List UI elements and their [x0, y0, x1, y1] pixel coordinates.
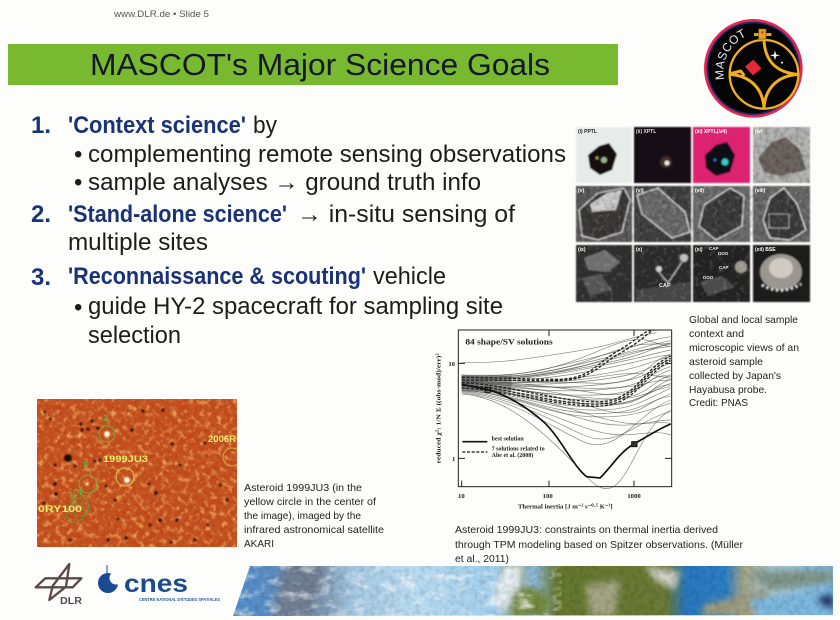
caption: sample views: Global and local sample — [689, 314, 798, 326]
chart: thermal inertia solutions — [436, 330, 672, 511]
caption: sample views: Credit: PNAS — [689, 397, 748, 409]
goal 1: • — [74, 141, 82, 168]
caption: thermal inertia chart: et al., 2011) — [455, 553, 509, 565]
panel index labels: (vii) — [695, 188, 704, 194]
caption: AKARI image: Asteroid 1999JU3 (in the — [244, 482, 362, 494]
chart axis labels: reduced χ²: 1/N Σ ((obs-mod)/err)² — [436, 353, 443, 463]
goal 3: • — [74, 294, 82, 321]
panel index labels: DOO — [718, 251, 729, 256]
goal 2: 2. — [31, 201, 51, 228]
target labels: 2 — [103, 413, 108, 423]
panel index labels: (xi) — [695, 247, 703, 253]
text block: science goals list — [31, 112, 566, 349]
caption: thermal inertia chart: Asteroid 1999JU3: constraints on thermal inertia derived — [455, 524, 718, 536]
goal 1: by — [253, 112, 277, 139]
icon: CNES logo — [98, 565, 220, 602]
target labels: 2006R — [208, 434, 236, 445]
panel index labels: (iii) XPTL(λ/4) — [695, 129, 727, 135]
chart legend: best solution — [492, 437, 524, 443]
caption: AKARI image: infrared astronomical satellite — [244, 524, 384, 536]
goal 1: complementing remote sensing observations — [88, 141, 566, 168]
heading: MASCOT's Major Science Goals — [90, 47, 550, 82]
target labels — [38, 413, 236, 515]
best solution curve — [462, 384, 671, 478]
chart legend — [462, 437, 545, 459]
goal 3: vehicle — [373, 263, 446, 290]
goal 3 — [31, 263, 503, 349]
panel index labels: (ii) XPTL — [636, 129, 656, 135]
chart legend: 7 solutions related to — [492, 446, 545, 452]
header: slide reference: www.DLR.de • Slide 5 — [113, 9, 209, 19]
caption: sample views — [689, 314, 799, 409]
goal 1: 'Context science' — [68, 112, 246, 139]
panel index labels: (v) — [578, 188, 584, 194]
chart axis labels: 1000 — [627, 493, 641, 500]
icon: DLR logo: DLR — [60, 595, 82, 607]
caption: thermal inertia chart — [455, 524, 743, 565]
target circles — [66, 426, 241, 522]
panel index labels: CAP — [659, 283, 671, 289]
target labels: 0RY100 — [38, 504, 82, 515]
goal 2: → in-situ sensing of — [297, 201, 515, 228]
caption: AKARI image — [244, 482, 384, 550]
chart legend: Abe et al. (2008) — [492, 452, 533, 459]
chart axis labels — [436, 353, 641, 511]
chart axis labels: 10 — [448, 361, 456, 368]
panel index labels: DOO — [703, 275, 714, 280]
chart axis labels: 100 — [543, 493, 553, 500]
chart axis labels: Thermal inertia [J m⁻² s⁻⁰·⁵ K⁻¹] — [518, 503, 613, 511]
panel index labels: (xii) BSE — [755, 247, 776, 253]
goal 1 — [31, 112, 566, 196]
clouds — [232, 566, 562, 616]
caption: sample views: Hayabusa probe. — [689, 384, 767, 396]
panel: Hayabusa sample micrographs — [576, 127, 810, 302]
caption: thermal inertia chart: through TPM modeling based on Spitzer observations. (Müller — [455, 539, 743, 551]
target labels: 1999JU3 — [103, 454, 148, 465]
caption: sample views: collected by Japan's — [689, 370, 781, 382]
caption: sample views: microscopic views of an — [689, 342, 799, 354]
dashed solutions — [462, 330, 671, 406]
caption: AKARI image: yellow circle in the center of — [244, 496, 376, 508]
goal 1: • — [74, 169, 82, 196]
icon: CNES logo: CENTRE NATIONAL D'ÉTUDES SPATIALES — [139, 595, 220, 602]
panel index labels: CAP — [709, 246, 719, 251]
caption: sample views: asteroid sample — [689, 356, 763, 368]
land and sea masses — [272, 566, 833, 616]
title banner — [8, 44, 618, 85]
caption: AKARI image: the image), imaged by the — [244, 510, 361, 522]
target labels: 3 — [83, 460, 88, 470]
micrograph row 2 — [576, 186, 810, 242]
chart title: 84 shape/SV solutions — [465, 338, 553, 347]
image: Earth satellite strip — [232, 566, 834, 616]
icon: MASCOT mission logo: MASCOT — [715, 28, 744, 80]
goal 1: 1. — [31, 112, 51, 139]
panel index labels: CAP — [719, 265, 729, 270]
panel index labels: (vi) — [636, 188, 644, 194]
goal 3: 3. — [31, 264, 51, 291]
micrograph row 1 — [576, 127, 810, 183]
panel index labels: (x) — [636, 247, 642, 253]
goal 1: sample analyses → ground truth info — [88, 169, 481, 196]
target labels: 5 — [70, 491, 75, 501]
target labels: 4 — [77, 487, 82, 497]
bright targets — [85, 431, 130, 486]
goal 2 — [31, 201, 515, 256]
chart ticks — [458, 330, 672, 487]
caption: AKARI image: AKARI — [244, 538, 274, 550]
goal 3: guide HY-2 spacecraft for sampling site — [88, 293, 503, 320]
chart axis labels: 10 — [458, 493, 465, 500]
icon: MASCOT mission logo — [704, 19, 803, 118]
goal 2: 'Stand-alone science' — [68, 201, 287, 228]
panel index labels: (ix) — [578, 247, 586, 253]
chart frame — [458, 330, 672, 487]
icon: CNES logo: cnes — [124, 570, 188, 598]
panel index labels: (i) PPTL — [578, 129, 597, 135]
image: AKARI infrared view of asteroid 1999JU3 — [37, 399, 241, 547]
goal 3: 'Reconnaissance & scouting' — [68, 263, 366, 290]
goal 3: selection — [88, 322, 181, 349]
caption: sample views: context and — [689, 328, 744, 340]
goal 2: multiple sites — [68, 229, 208, 256]
error bar band — [462, 375, 512, 392]
panel index labels — [578, 129, 776, 289]
panel index labels: (viii) — [755, 188, 766, 194]
chart curves — [462, 333, 671, 489]
micrograph row 3 — [576, 245, 810, 302]
dark background stars — [43, 408, 228, 543]
micrograph texture — [576, 127, 810, 302]
panel index labels: (iv) — [755, 129, 763, 135]
icon: DLR logo — [36, 564, 82, 607]
chart axis labels: 1 — [452, 456, 455, 463]
